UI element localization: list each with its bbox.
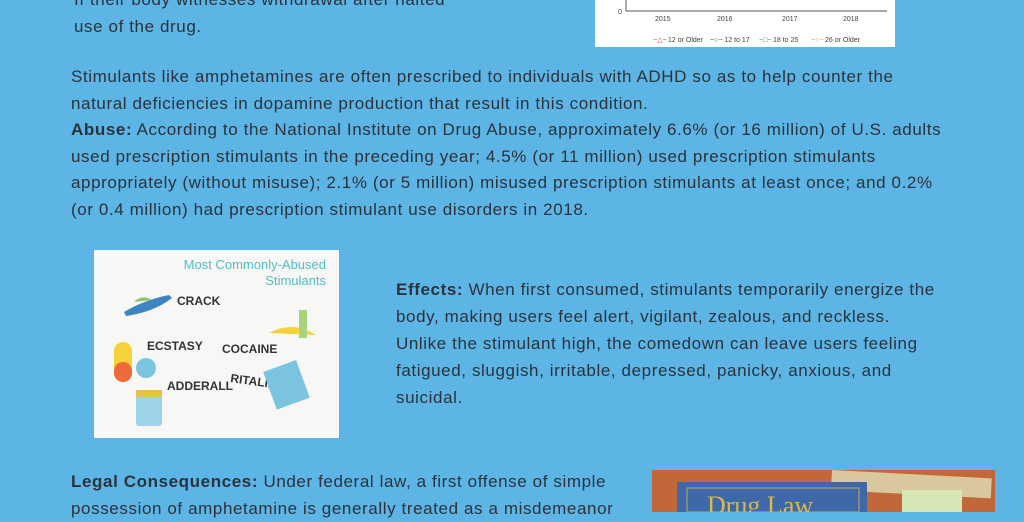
text: effects: Unlike the stimulant high, the comedown can leave users feeling [396,334,918,353]
text: stimulants and abuse paragraph: appropriately (without misuse); 2.1% (or 5 million) misused prescription stimulants at least once; and 0.2% [71,173,933,192]
text: withdrawal fragment: use of the drug. [74,16,202,36]
text: withdrawal fragment [74,0,445,36]
text: stimulants and abuse paragraph [71,67,941,218]
chart fragment: 2016 [717,16,733,23]
legend: −△− [653,37,667,44]
text: effects: Effects: When first consumed, stimulants temporarily energize the [396,280,935,299]
legend: 12 or Older [668,37,704,44]
legend: −□− [759,37,771,44]
chart fragment [595,0,895,47]
text: stimulants and abuse paragraph: Abuse: According to the National Institute on Drug Abuse, approximately 6.6% (or 16 million) of U.S. adults [71,120,941,139]
chart fragment: 2017 [782,16,798,23]
chart fragment: 2018 [843,16,859,23]
text: legal consequences: Legal Consequences: Under federal law, a first offense of simple [71,472,606,491]
legend: −○− 12 to 17 [710,37,750,44]
text: stimulants and abuse paragraph: used prescription stimulants in the preceding year; 4.5% (or 11 million) used prescription stimulants [71,146,876,166]
text: stimulants and abuse paragraph: Stimulants like amphetamines are often prescribed to individuals with ADHD so as to help counter the [71,67,894,86]
image: most commonly abused stimulants: Most Commonly-Abused [184,257,326,272]
legend: 18 to 25 [773,37,798,44]
image: most commonly abused stimulants: ECSTASY [147,339,203,353]
image: most commonly abused stimulants: CRACK [177,294,221,308]
image: most commonly abused stimulants: RITALIN [230,371,278,391]
image: most commonly abused stimulants [94,250,339,438]
text: legal consequences: possession of amphetamine is generally treated as a misdemeanor [71,498,613,518]
image: most commonly abused stimulants: COCAINE [222,342,277,356]
text: legal consequences [71,472,613,518]
text: effects: body, making users feel alert, vigilant, zealous, and reckless. [396,307,890,326]
chart fragment: 0 [618,9,622,16]
text: effects [396,280,935,407]
chart fragment: 2015 [655,16,671,23]
text: stimulants and abuse paragraph: (or 0.4 million) had prescription stimulant use disorders in 2018. [71,200,589,218]
text: effects: suicidal. [396,388,463,407]
legend: −○− [811,37,823,44]
image: most commonly abused stimulants: ADDERALL [167,379,233,393]
legend [653,37,861,44]
image: most commonly abused stimulants: Stimulants [265,273,326,288]
text: stimulants and abuse paragraph: natural deficiencies in dopamine production that result in this condition. [71,94,648,112]
text: effects: fatigued, sluggish, irritable, depressed, panicky, anxious, and [396,361,892,380]
image: drug law book [652,470,995,512]
legend: 26 or Older [825,37,861,44]
